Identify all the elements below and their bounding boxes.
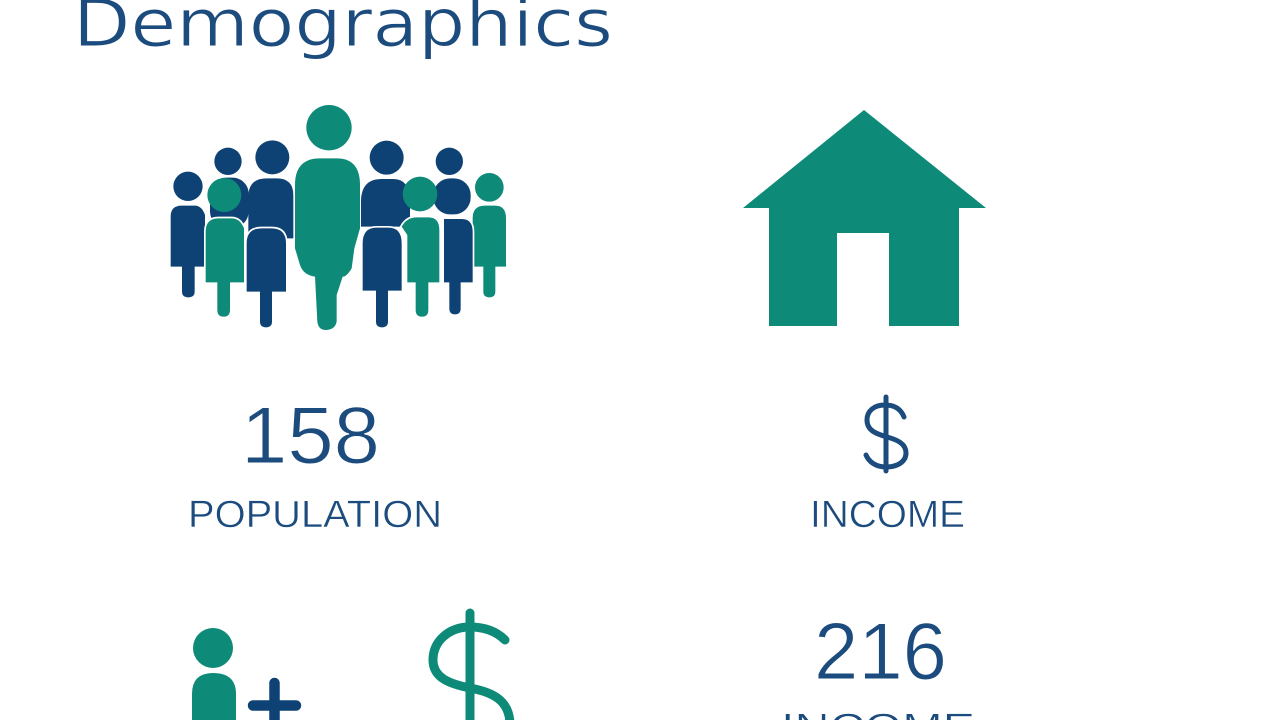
income label: INCOME bbox=[810, 494, 965, 536]
population label: POPULATION bbox=[188, 494, 442, 536]
population value: 158 bbox=[241, 391, 380, 481]
icon: person with plus bbox=[192, 628, 296, 720]
icon: group of people bbox=[171, 105, 506, 330]
icon: income dollar sign bbox=[866, 397, 906, 471]
icon: house bbox=[743, 110, 986, 326]
icon: large dollar sign bbox=[433, 613, 510, 720]
second value: 216 bbox=[814, 607, 947, 697]
